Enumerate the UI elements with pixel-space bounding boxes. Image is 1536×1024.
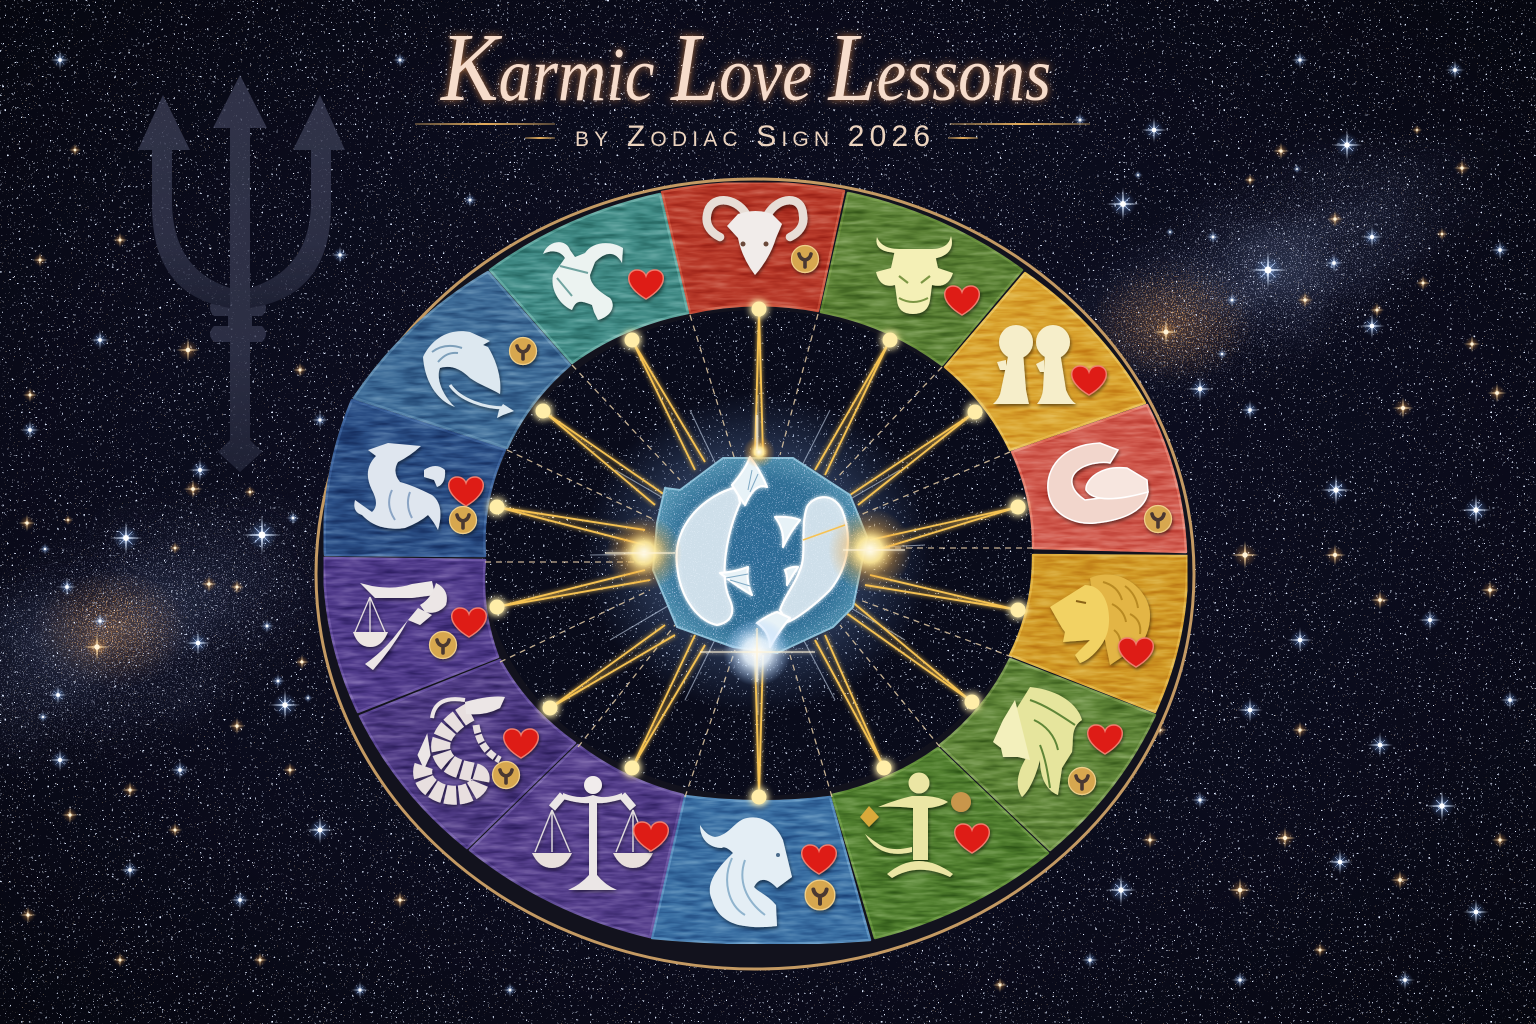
segment: Cancer (1012, 405, 1186, 552)
segment: purple scales (470, 745, 683, 937)
hub disc (653, 458, 867, 653)
segment: Aries (662, 183, 844, 313)
right fish (757, 497, 848, 647)
dashed divider lines (485, 314, 1033, 797)
icon: Leo lion (1050, 574, 1150, 665)
hub starlight (650, 455, 870, 655)
centre hub: Pisces (605, 415, 912, 686)
icon: Taurus bull (876, 236, 953, 314)
icon: silver scales (532, 776, 653, 890)
icon: green scales figure (860, 772, 971, 878)
segment: archer (324, 558, 498, 712)
segment: Leo (1010, 555, 1187, 712)
icon: Scorpio scorpion (418, 697, 505, 795)
icon: Gemini twins (993, 325, 1076, 404)
hub light streaks (590, 395, 925, 715)
segment: Virgo (940, 659, 1155, 850)
segment: lobster (490, 194, 688, 363)
segment: fish (354, 272, 570, 448)
segment: Taurus (821, 193, 1022, 365)
title divider lines (415, 123, 1090, 139)
icon: Cancer crescents (1048, 443, 1148, 523)
icon: lobster (543, 242, 623, 320)
segment: green scales (832, 748, 1048, 938)
segment: Gemini (945, 273, 1145, 450)
icon: Neptune trident (138, 75, 345, 472)
segment: sea-horse (324, 400, 505, 556)
hearts (449, 270, 1153, 874)
segment: Capricorn (652, 796, 870, 944)
icon: sea-horse (354, 443, 445, 530)
karmic coins (430, 246, 1172, 910)
wheel outer ring (316, 179, 1194, 969)
subtitle: by Zodiac Sign 2026 (575, 120, 930, 153)
segment: Scorpio (360, 660, 575, 848)
title: Karmic Love Lessons (439, 14, 1051, 122)
icon: archer with scales (353, 581, 447, 670)
icon: Virgo maiden (993, 687, 1082, 797)
icon: Aries ram (707, 200, 803, 275)
panel: zodiac segments (324, 183, 1187, 944)
lens flares (605, 415, 912, 686)
zodiac wheel (316, 179, 1194, 969)
glowing nodes (490, 302, 1026, 804)
wheel centre sky (480, 310, 1036, 796)
left fish (676, 457, 767, 625)
icon: fish (423, 331, 514, 418)
icon: Capricorn sea-goat (700, 817, 792, 927)
gold rays (497, 310, 1018, 797)
